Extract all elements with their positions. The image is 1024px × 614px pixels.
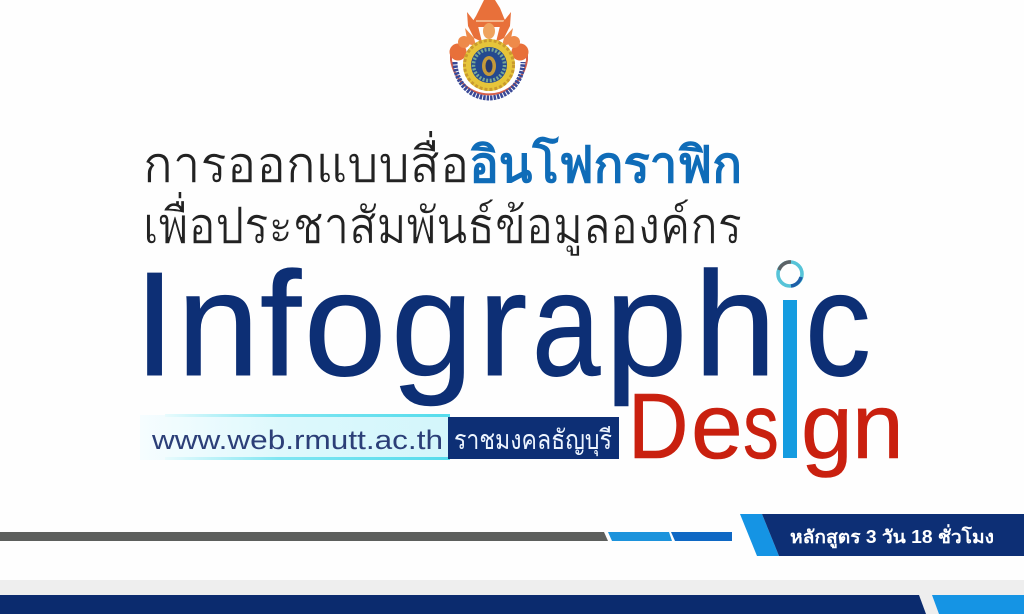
title: Infographic: ph bbox=[605, 242, 776, 407]
icon: university crest logo bbox=[450, 0, 528, 98]
university name box: ราชมงคลธัญบุรี bbox=[454, 425, 612, 457]
subtitle: Design: e bbox=[691, 374, 743, 478]
bottom grey strip bbox=[0, 580, 1024, 614]
heading: Thai title line 1: การออกแบบสื่ออินโฟกราฟิก bbox=[143, 131, 742, 193]
subtitle: Design bbox=[628, 374, 904, 478]
blue letter i bar bbox=[783, 300, 797, 458]
duration text: หลักสูตร 3 วัน 18 ชั่วโมง bbox=[790, 524, 994, 549]
title: Infographic: c bbox=[805, 241, 871, 407]
url banner bbox=[140, 414, 450, 460]
university name box bbox=[448, 417, 619, 459]
heading: Thai title line 2: เพื่อประชาสัมพันธ์ข้อมูลองค์กร bbox=[143, 192, 742, 256]
subtitle: Design: gn bbox=[801, 374, 904, 478]
bottom navy bar bbox=[0, 595, 926, 614]
divider bar: grey bbox=[0, 532, 608, 541]
subtitle: Design: D bbox=[628, 374, 688, 478]
icon: ring dot of letter i bbox=[778, 262, 802, 286]
title: Infographic: Infogr bbox=[134, 242, 527, 407]
title: Infographic bbox=[134, 241, 871, 407]
duration badge bbox=[740, 514, 1024, 556]
subtitle: Design: s bbox=[743, 374, 779, 478]
divider bar: blue segment bbox=[671, 532, 732, 541]
title: Infographic: a bbox=[532, 241, 601, 407]
url text: www.web.rmutt.ac.th bbox=[151, 425, 443, 455]
bottom light blue block bbox=[932, 595, 1024, 614]
divider bar: light blue segment bbox=[608, 532, 672, 541]
